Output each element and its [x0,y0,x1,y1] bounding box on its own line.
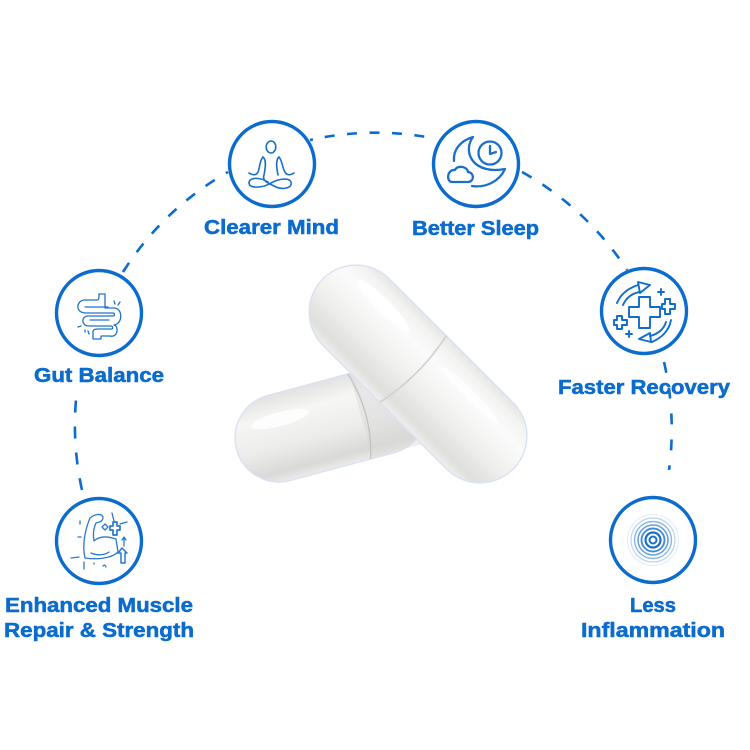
label: Less: Less [630,594,676,617]
label: Faster Recovery: Faster Recovery [558,376,731,399]
icon: moon, clock and cloud [448,137,505,186]
label: Gut Balance: Gut Balance [34,364,164,387]
dashed arc connecting benefits [75,133,672,490]
circle: Better Sleep [434,122,518,206]
label: Enhanced Muscle: Enhanced Muscle [5,594,193,617]
benefit: Gut Balance [34,270,164,387]
benefit: Less Inflammation [581,498,725,642]
icon: medical crosses and circular arrows [614,282,675,342]
label: Repair & Strength: Repair & Strength [4,619,194,642]
label: Clearer Mind: Clearer Mind [204,216,339,239]
circle: Gut Balance [56,270,142,356]
circle: Muscle [56,498,142,584]
upper capsule [290,246,546,502]
label: Inflammation: Inflammation [581,619,725,642]
benefit: Faster Recovery [558,268,731,399]
icon: intestines [78,294,121,339]
benefit: Clearer Mind [204,122,339,239]
icon: meditating figure [249,141,294,188]
circle: Clearer Mind [230,122,314,206]
circle: Inflammation [610,498,696,582]
circle: Faster Recovery [602,268,686,354]
benefit: Better Sleep [412,122,539,240]
icon: concentric ripples [628,514,678,566]
label: Better Sleep: Better Sleep [412,217,539,240]
lower capsule [225,356,436,492]
benefit: Enhanced Muscle Repair & Strength [4,498,194,642]
capsules illustration [225,246,546,502]
icon: flexed arm with cross and arrows [71,513,127,569]
